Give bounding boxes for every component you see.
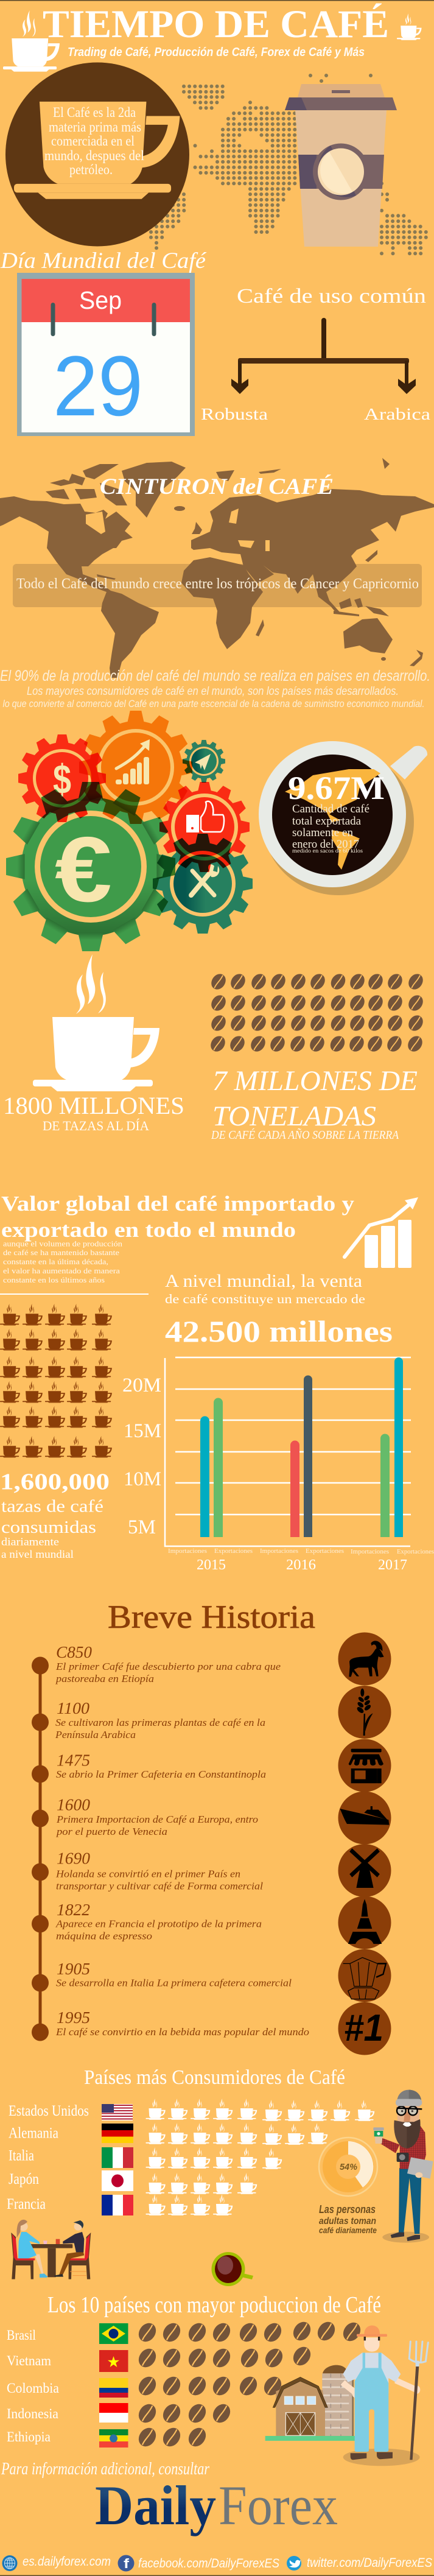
map on coffee [285, 769, 380, 870]
illustration: man with coffee [373, 2090, 433, 2243]
logo: DailyForex [95, 2474, 338, 2536]
gear: red thumb [159, 782, 250, 872]
x labels [168, 1548, 434, 1555]
country labels: Ethiopia [7, 2429, 51, 2444]
text block: production volume: de café se ha mantenido bastante [3, 1248, 119, 1257]
fact text: materia prima más [49, 119, 141, 135]
icon: goat, wheat, shop, ship [340, 1641, 389, 1825]
country labels: Indonesia [7, 2406, 58, 2421]
logo: DailyForex: Daily [95, 2474, 216, 2536]
y labels: 20M [122, 1374, 161, 1396]
y labels: 5M [128, 1516, 156, 1538]
flag: Vietnam [99, 2350, 128, 2372]
icon: white cup [33, 954, 159, 1091]
country labels: Japón [9, 2171, 39, 2187]
icon: cup silhouette [14, 102, 180, 199]
heading: Café de uso común [237, 285, 426, 308]
illustration: couple at table [11, 2220, 91, 2279]
heading: Breve Historia [108, 1599, 315, 1635]
timeline text: C850 [56, 1643, 92, 1661]
figure: 1800 MILLONES [3, 1092, 184, 1119]
x labels: Exportaciones [397, 1549, 434, 1555]
y labels [122, 1374, 161, 1538]
timeline text: Aparece en Francia el prototipo de la primera [55, 1918, 262, 1930]
timeline text: Primera Importacion de Café a Europa, entro [56, 1814, 258, 1825]
text block: production volume: constante en los últimos años [3, 1275, 105, 1284]
flag: Colombia [99, 2378, 128, 2398]
country labels: Italia [9, 2148, 34, 2164]
timeline text: 1822 [57, 1901, 90, 1919]
bean grid [208, 971, 426, 1054]
icon discs [338, 1632, 391, 2055]
panel: 1800 million cups [3, 954, 184, 1133]
y labels: 10M [124, 1468, 161, 1490]
link: facebook: facebook.com/DailyForexES [138, 2557, 279, 2571]
market size heading [165, 1271, 393, 1348]
flag: Italy [102, 2147, 133, 2168]
timeline text: Se abrio la Primer Cafeteria en Constantinopla [56, 1768, 266, 1780]
timeline [32, 1656, 49, 2041]
timeline text: transportar y cultivar café de Forma comercial [56, 1881, 263, 1892]
panel: coffee fact circle [5, 62, 189, 246]
arrow tree [231, 318, 416, 394]
donut caption: Las personas [319, 2203, 376, 2215]
country labels: Vietnam [7, 2353, 51, 2368]
calendar icon [17, 273, 195, 436]
inland seas [86, 509, 270, 551]
axes [165, 1358, 410, 1546]
caption: total exportada [292, 815, 362, 828]
donut caption [319, 2203, 377, 2235]
stat: 1,600,000 cups: 1,600,000 [0, 1469, 110, 1494]
bar chart [122, 1357, 434, 1573]
text block: production volume: el valor ha aumentado de manera [3, 1266, 120, 1275]
flag: Japan [102, 2170, 133, 2191]
timeline text: Se cultivaron las primeras plantas de café en la [55, 1717, 265, 1728]
flag: Ethiopia [99, 2429, 128, 2448]
timeline text: El primer Café fue descubierto por una cabra que [55, 1661, 281, 1672]
logo: DailyForex: Forex [219, 2474, 338, 2536]
timeline text: El café se convirtio en la bebida mas popular del mundo [55, 2026, 309, 2038]
link: website: es.dailyforex.com [23, 2555, 111, 2569]
market size heading: de café constituye un mercado de [165, 1292, 365, 1306]
gear: green euro [6, 782, 175, 951]
pictogram: brown cups [0, 1304, 112, 1458]
years: 2016 [286, 1557, 316, 1573]
timeline text: 1905 [57, 1960, 90, 1978]
text block: production and consumption [0, 667, 430, 709]
cup handle [390, 746, 427, 779]
market size heading: 42.500 millones [165, 1314, 393, 1348]
country labels [7, 2328, 59, 2444]
donut caption: adultas toman [319, 2216, 376, 2226]
caption: enero del 2017 [292, 838, 359, 851]
timeline text: pastoreaba en Etiopía [55, 1673, 154, 1684]
x labels: Importaciones [260, 1548, 298, 1555]
figure: 9.67M: 9.67M [288, 770, 385, 806]
flag: Brazil [99, 2323, 128, 2344]
flag: Indonesia [99, 2403, 128, 2423]
timeline text: 1600 [57, 1796, 91, 1814]
donut caption: café diariamente [319, 2225, 377, 2235]
pictogram: beans [135, 2318, 364, 2450]
gear: green euro: € [55, 818, 112, 921]
panel: top producing countries [7, 2292, 428, 2466]
x labels: Importaciones [168, 1548, 207, 1555]
grid lines [175, 1357, 411, 1515]
country labels: Alemania [9, 2125, 58, 2142]
stat: 1,600,000 cups: a nivel mundial [1, 1548, 74, 1560]
heading: global value [1, 1192, 355, 1242]
cup shadow [263, 749, 414, 895]
figure: 7 MILLONES DE [212, 1065, 418, 1097]
gear: orange chart [79, 711, 192, 824]
timeline text: 1995 [57, 2008, 90, 2027]
country labels: Colombia [7, 2381, 59, 2396]
heading: Países más Consumidores de Café [84, 2066, 345, 2089]
coffee types diagram [201, 285, 430, 423]
timeline text: por el puerto de Venecia [56, 1826, 167, 1837]
timeline text: Península Arabica [55, 1729, 136, 1740]
caption [292, 803, 369, 854]
brown circle [5, 62, 189, 246]
country labels: Brasil [7, 2328, 36, 2343]
text block: production volume: aunque el volumen de producción [3, 1239, 123, 1248]
y labels: 15M [124, 1420, 161, 1442]
icon: small coffee cup [397, 13, 422, 40]
illustration: barn, silo and farmer [265, 2326, 428, 2466]
flag: France [102, 2195, 133, 2215]
label: Arabica: Arabica [364, 405, 430, 423]
text: further information: Para información adicional, consultar [1, 2460, 209, 2479]
fact text: comerciada en el [51, 133, 135, 149]
heading: world coffee day: Día Mundial del Café [0, 248, 207, 273]
panel: 7 million tonnes [208, 971, 426, 1142]
subtitle: Trading de Café, Producción de Café, Forex de Café y Más [68, 46, 365, 59]
panel: brief history [32, 1599, 391, 2055]
heading: global value: exportado en todo el mundo [1, 1218, 296, 1242]
gears illustration [6, 711, 253, 951]
years: 2015 [197, 1557, 226, 1573]
icon: growth chart [345, 1197, 418, 1268]
timeline text: 1100 [57, 1699, 90, 1717]
timeline text: Se desarrolla en Italia La primera cafetera comercial [56, 1977, 292, 1989]
text block: production volume: constante en la última década, [3, 1257, 108, 1266]
country labels: Francia [7, 2196, 46, 2212]
caption: DE TAZAS AL DÍA [43, 1118, 149, 1133]
gear: red dollar: $ [53, 756, 71, 803]
caption: medido en sacos de 60 kilos [292, 848, 363, 854]
donut chart: 54%: 54% [340, 2162, 357, 2172]
x labels: Importaciones [351, 1549, 389, 1555]
gear: teal tools [153, 834, 253, 934]
fact text: El Café es la 2da [53, 105, 136, 120]
icon: facebook: f [124, 2556, 130, 2571]
pictogram: white cups [146, 2099, 374, 2215]
caption: Cantidad de café [292, 803, 369, 815]
icon: facebook [118, 2555, 134, 2571]
icon: takeaway coffee cup [285, 84, 397, 247]
gear: teal plane [183, 740, 225, 783]
icon: large coffee cup [3, 10, 60, 72]
caption: solamente en [292, 826, 353, 839]
fact text: mundo, despues del [44, 148, 144, 163]
country labels: Estados Unidos [9, 2103, 89, 2119]
years: 2017 [378, 1557, 407, 1573]
country labels [7, 2103, 89, 2212]
years [197, 1557, 407, 1573]
title: TIEMPO DE CAFÉ [43, 2, 389, 46]
stat: 1,600,000 cups [0, 1469, 110, 1560]
icon: globe [2, 2555, 17, 2571]
calendar icon: Sep [79, 286, 122, 314]
cup rim [259, 741, 406, 887]
gear: red dollar [18, 734, 106, 822]
caption: DE CAFÉ CADA AÑO SOBRE LA TIERRA [211, 1127, 399, 1142]
panel: 9.67M exported coffee [259, 741, 427, 895]
timeline text: máquina de espresso [56, 1930, 152, 1942]
fact text [44, 105, 144, 177]
text block: production volume [3, 1239, 123, 1284]
stat: 1,600,000 cups: diariamente [1, 1536, 59, 1548]
belt caption: Todo el Café del mundo crece entre los trópicos de Cancer y Capricornio [16, 576, 419, 592]
timeline text: 1690 [57, 1849, 91, 1868]
timeline text: 1475 [57, 1751, 90, 1770]
world map [0, 458, 434, 678]
calendar icon: 29 [53, 338, 143, 434]
panel: top consuming countries [7, 2066, 433, 2286]
stat: 1,600,000 cups: tazas de café [1, 1497, 103, 1516]
icon: windmill, eiffel tower, moka pot [343, 1850, 386, 1999]
icon: twitter [287, 2556, 301, 2571]
stat: 1,600,000 cups: consumidas [1, 1518, 96, 1537]
icon: number one: #1 [344, 2007, 383, 2049]
tropic band [13, 564, 422, 607]
heading: coffee belt: CINTURON del CAFÉ [100, 474, 334, 499]
footer links [2, 2555, 432, 2571]
coffee surface [272, 755, 393, 875]
timeline text: Holanda se convirtió en el primer País en [55, 1868, 240, 1880]
flag: USA [102, 2104, 133, 2120]
label: Robusta: Robusta [201, 405, 268, 423]
heading: global value: Valor global del café importado y [1, 1192, 355, 1216]
panel: coffee belt map [0, 458, 434, 678]
dotted world map [151, 76, 427, 253]
x labels: Exportaciones [306, 1548, 344, 1555]
fact text: petróleo. [69, 162, 113, 177]
donut chart: 54% [319, 2138, 377, 2196]
timeline text [55, 1643, 309, 2038]
header [3, 2, 422, 72]
market size heading: A nivel mundial, la venta [165, 1271, 362, 1291]
bars [200, 1416, 209, 1537]
flag: Germany [102, 2124, 133, 2143]
panel: 7 million tonnes: TONELADAS [212, 1100, 376, 1132]
x labels: Exportaciones [214, 1548, 253, 1555]
icon: small cup top view [212, 2252, 253, 2286]
